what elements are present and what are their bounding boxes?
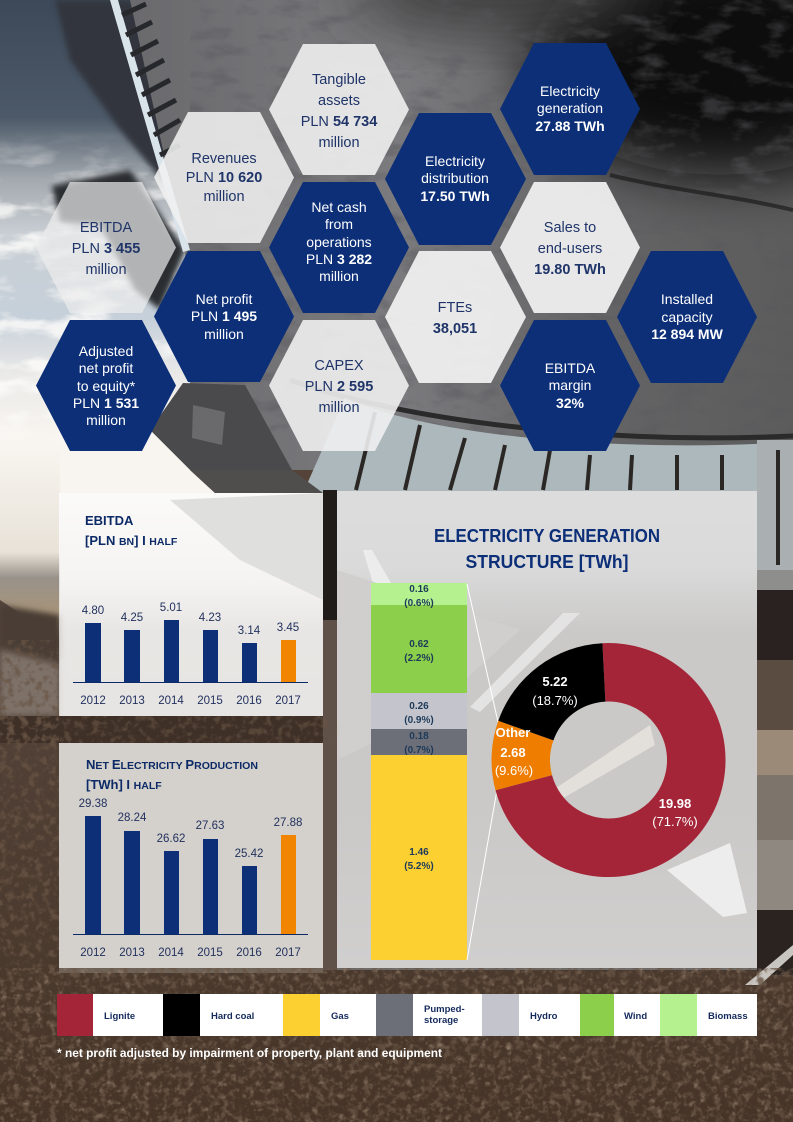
hexagon: CAPEX: CAPEX <box>314 358 364 374</box>
hexagon: tangible assets <box>269 44 409 175</box>
hexagon: FTEs <box>385 251 526 383</box>
bar chart: production values: 25.42 <box>235 848 263 860</box>
bar chart: EBITDA values: 4.25 <box>121 612 143 624</box>
panel: net electricity production chart <box>59 743 323 968</box>
hexagon: net cash from operations: million <box>319 268 359 284</box>
hexagon: net profit: PLN 1 495 <box>191 308 257 324</box>
hexagon: adjusted net profit: PLN 1 531 <box>73 395 139 411</box>
legend: Biomass <box>708 1011 748 1022</box>
donut chart: generation by fuel: Other <box>496 725 530 740</box>
hexagon: tangible assets: Tangible <box>312 72 366 88</box>
chart heading: EBITDA: [PLN BN] I HALF <box>85 533 177 548</box>
hexagon: FTEs: 38,051 <box>433 321 477 337</box>
hexagon: installed capacity: capacity <box>661 309 713 325</box>
bar chart: production values: 27.88 <box>274 817 302 829</box>
hexagon: EBITDA <box>36 182 176 313</box>
hexagon: EBITDA margin <box>500 320 640 451</box>
hexagon grid: key figures <box>36 43 757 451</box>
stacked bar: other sources breakdown: 0.16 <box>409 584 429 595</box>
donut chart: generation by fuel: (18.7%) <box>532 693 578 708</box>
bar chart: EBITDA values: 2012 <box>80 695 106 707</box>
bar chart: production values: 27.63 <box>196 820 224 832</box>
hexagon: net cash from operations: Net cash <box>311 199 367 215</box>
donut chart: generation by fuel: (9.6%) <box>495 763 533 778</box>
hexagon: net cash from operations: from <box>325 216 353 232</box>
hexagon: CAPEX: PLN 2 595 <box>305 379 373 395</box>
bar chart: EBITDA values: 4.80 <box>82 605 104 617</box>
bar chart: production values: 28.24 <box>118 812 147 824</box>
hexagon: FTEs: FTEs <box>438 300 472 316</box>
hexagon: EBITDA margin: EBITDA <box>545 360 596 376</box>
bar chart: production values: 2017 <box>275 947 301 959</box>
bar chart: production values: 26.62 <box>157 833 185 845</box>
bar chart: EBITDA values: 3.14 <box>238 625 261 637</box>
stacked bar: other sources breakdown: 1.46 <box>409 847 429 858</box>
hexagon: EBITDA: EBITDA <box>80 220 133 236</box>
hexagon: installed capacity: Installed <box>661 291 713 307</box>
bar chart: production values: 2012 <box>80 947 106 959</box>
hexagon: net cash from operations: PLN 3 282 <box>306 251 372 267</box>
hexagon: tangible assets: million <box>318 135 360 151</box>
hexagon: installed capacity: 12 894 MW <box>651 326 724 342</box>
bar chart: EBITDA values: 2015 <box>197 695 223 707</box>
donut chart: generation by fuel: 2.68 <box>500 745 526 760</box>
hexagon: electricity distribution: 17.50 TWh <box>420 188 490 204</box>
hexagon: CAPEX: million <box>318 400 360 416</box>
hexagon: adjusted net profit: million <box>86 412 126 428</box>
bar chart: EBITDA values: 2017 <box>275 695 301 707</box>
stacked bar: other sources breakdown: (0.6%) <box>404 598 434 609</box>
hexagon: adjusted net profit: Adjusted <box>79 343 133 359</box>
hexagon: EBITDA margin: margin <box>549 377 591 393</box>
donut chart: generation by fuel <box>492 643 726 877</box>
chart heading: EBITDA: EBITDA <box>85 513 133 528</box>
hexagon: electricity distribution <box>385 113 526 245</box>
bar chart: EBITDA values: 3.45 <box>277 622 299 634</box>
stacked bar: other sources breakdown <box>371 583 467 960</box>
hexagon: revenues: Revenues <box>191 151 257 167</box>
hexagon: adjusted net profit: to equity* <box>77 378 136 394</box>
donut chart: generation by fuel: 19.98 <box>659 796 691 811</box>
hexagon: sales to end-users: Sales to <box>544 220 596 236</box>
bar chart: production values <box>73 798 308 959</box>
heading: electricity generation structure <box>434 526 660 572</box>
hexagon: electricity distribution: distribution <box>421 170 489 186</box>
stacked bar: other sources breakdown: (5.2%) <box>404 861 434 872</box>
hexagon: tangible assets: assets <box>318 93 360 109</box>
legend: Lignite <box>104 1011 135 1022</box>
stacked bar: other sources breakdown: 0.26 <box>409 701 429 712</box>
hexagon: adjusted net profit: net profit <box>79 360 133 376</box>
hexagon: revenues: million <box>203 189 245 205</box>
hexagon: CAPEX <box>269 320 409 451</box>
connector lines <box>467 584 498 960</box>
legend: Hydro <box>530 1011 558 1022</box>
hexagon: EBITDA: million <box>85 262 127 278</box>
hexagon: revenues: PLN 10 620 <box>186 170 262 186</box>
bar chart: EBITDA values: 2016 <box>236 695 262 707</box>
bar chart: EBITDA values: 2014 <box>158 695 184 707</box>
hexagon: sales to end-users: 19.80 TWh <box>534 262 606 278</box>
hexagon: net profit: million <box>204 326 244 342</box>
bar chart: EBITDA values: 4.23 <box>199 612 221 624</box>
bar chart: EBITDA values: 5.01 <box>160 602 182 614</box>
hexagon: sales to end-users <box>500 182 640 313</box>
hexagon: revenues <box>154 112 294 243</box>
hexagon: EBITDA: PLN 3 455 <box>72 241 140 257</box>
hexagon: tangible assets: PLN 54 734 <box>301 114 377 130</box>
legend: storage <box>424 1015 458 1026</box>
hexagon: sales to end-users: end-users <box>538 241 602 257</box>
hexagon: EBITDA margin: 32% <box>556 395 585 411</box>
hexagon: net profit <box>154 251 294 382</box>
panel: EBITDA chart <box>59 493 323 716</box>
legend: Wind <box>624 1011 647 1022</box>
stacked bar: other sources breakdown: (0.9%) <box>404 715 434 726</box>
footnote: * net profit adjusted by impairment of property, plant and equipment <box>57 1046 442 1060</box>
legend: Pumped- <box>424 1004 465 1015</box>
hexagon: electricity generation <box>500 43 640 175</box>
stacked bar: other sources breakdown: 0.62 <box>409 639 429 650</box>
stacked bar: other sources breakdown: (2.2%) <box>404 653 434 664</box>
donut chart: generation by fuel: (71.7%) <box>652 814 698 829</box>
bar chart: production values: 2016 <box>236 947 262 959</box>
hexagon: electricity generation: Electricity <box>540 83 600 99</box>
hexagon: electricity generation: 27.88 TWh <box>535 118 605 134</box>
hexagon: electricity distribution: Electricity <box>425 153 485 169</box>
legend: Gas <box>331 1011 349 1022</box>
bar chart: EBITDA values: 2013 <box>119 695 145 707</box>
chart heading: net electricity production: NET ELECTRICITY PRODUCTION <box>86 757 258 772</box>
hexagon: net cash from operations <box>269 182 409 313</box>
legend: Hard coal <box>211 1011 254 1022</box>
bar chart: production values: 2013 <box>119 947 145 959</box>
hexagon: adjusted net profit <box>36 320 176 451</box>
heading: electricity generation structure: STRUCTURE [TWh] <box>466 552 628 572</box>
panel: electricity generation structure <box>337 491 757 968</box>
hexagon: electricity generation: generation <box>537 100 603 116</box>
bar chart: production values: 2014 <box>158 947 184 959</box>
hexagon: net cash from operations: operations <box>306 234 372 250</box>
hexagon: net profit: Net profit <box>196 291 253 307</box>
hexagon: installed capacity <box>617 251 757 383</box>
chart subheading: unit: [TWh] I HALF <box>86 777 162 792</box>
stacked bar: other sources breakdown: (0.7%) <box>404 745 434 756</box>
heading: electricity generation structure: ELECTRICITY GENERATION <box>434 526 660 546</box>
bar chart: production values: 29.38 <box>79 798 107 810</box>
bar chart: production values: 2015 <box>197 947 223 959</box>
legend <box>57 994 757 1036</box>
bar chart: EBITDA values <box>73 602 308 707</box>
stacked bar: other sources breakdown: 0.18 <box>409 731 429 742</box>
donut chart: generation by fuel: 5.22 <box>542 674 568 689</box>
